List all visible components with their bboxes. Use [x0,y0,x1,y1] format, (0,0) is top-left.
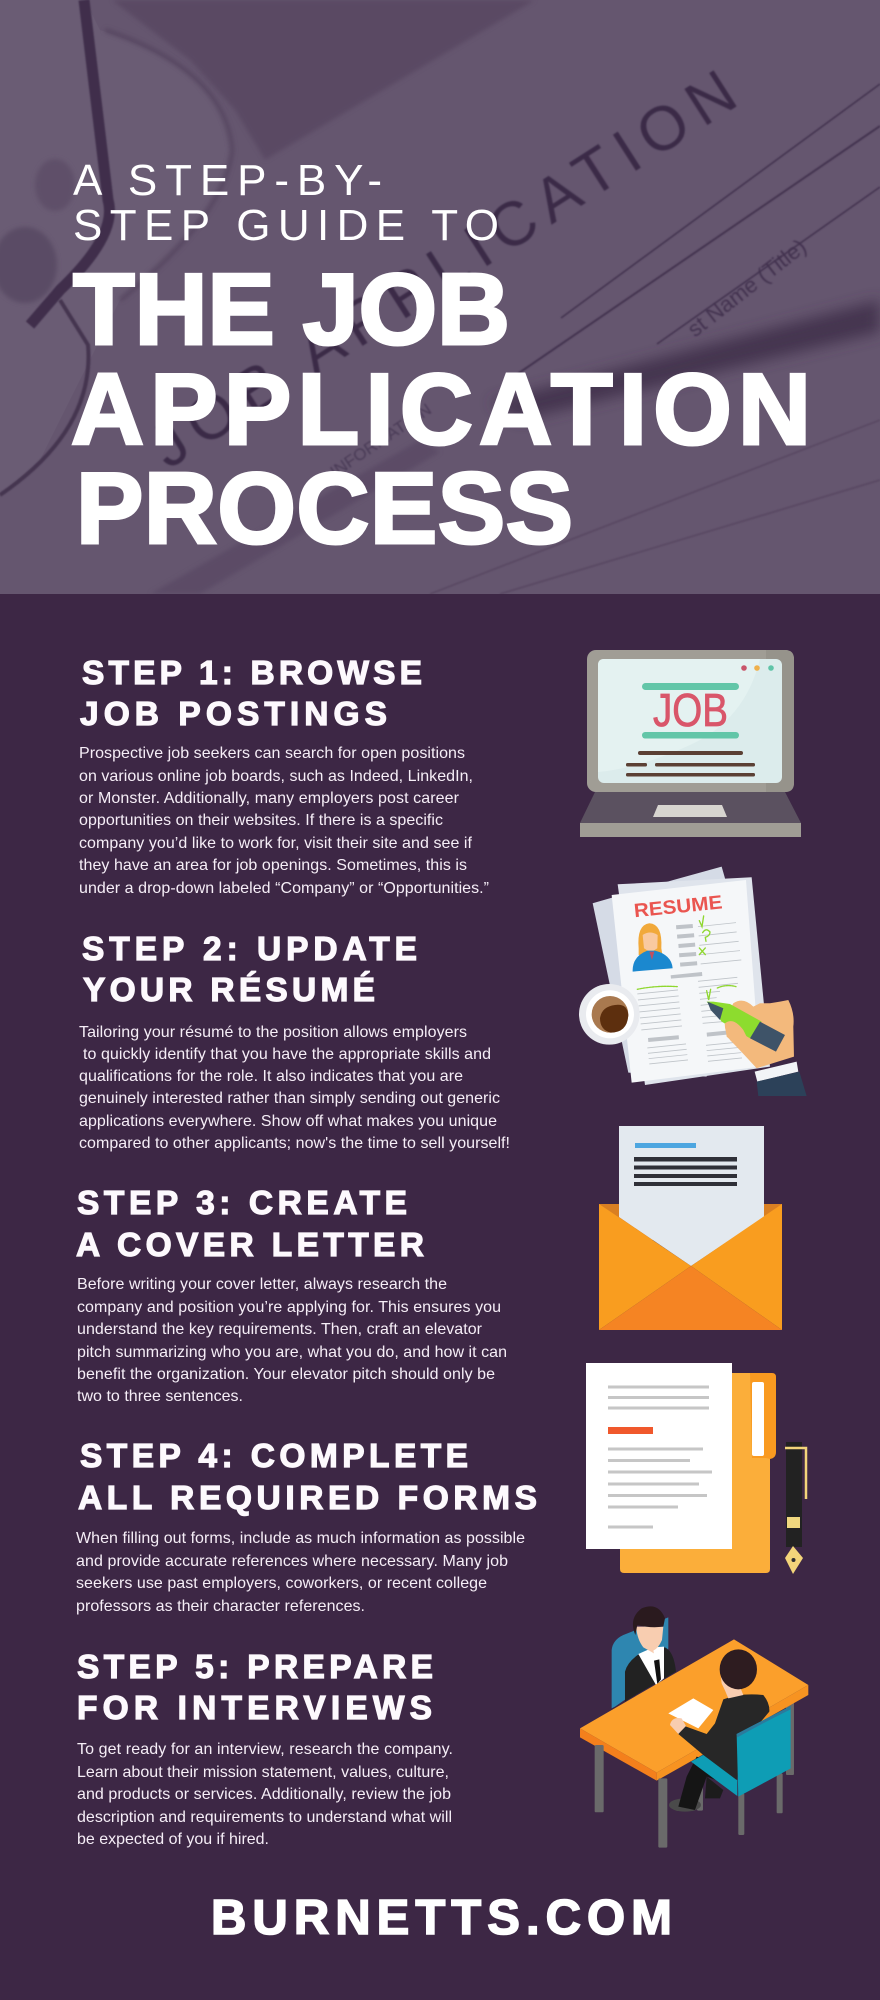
interviewer and chair [612,1606,676,1708]
hand with highlighter [707,1000,807,1096]
icon: envelope with letter [599,1126,782,1330]
step 1 body [79,745,489,897]
step 2 body: compared to other applicants; now's the time to sell yourself! [79,1135,510,1152]
step 2 heading: STEP 2: UPDATE [82,931,417,968]
step 5 body: and products or services. Additionally, review the job [77,1786,451,1803]
green review marks [637,916,736,1000]
step 4 body: When filling out forms, include as much information as possible [76,1530,525,1547]
step 2 heading: YOUR RÉSUMÉ [83,971,375,1009]
title: A STEP-BY- [73,156,382,205]
step 3 heading: STEP 3: CREATE [77,1185,407,1222]
step 2 body: genuinely interested rather than simply sending out generic [79,1090,500,1107]
step 1 body: or Monster. Additionally, many employers post career [79,790,460,807]
step 5 body: description and requirements to understand what will [77,1809,452,1826]
step 2 body: to quickly identify that you have the appropriate skills and [83,1046,491,1063]
step 5 heading [77,1649,433,1727]
header photo: job application form with glasses and pen: INFORMATION [327,400,435,481]
icon: resume with highlighter and coffee [579,867,807,1096]
title: PROCESS [76,453,573,565]
icon: laptop showing job listing: JOB [653,684,728,736]
fountain pen [785,1442,806,1574]
step 3 body: two to three sentences. [77,1388,243,1405]
header photo: job application form with glasses and pen: JOB APPLICATION [138,57,748,482]
step 2 body: Tailoring your résumé to the position allows employers [79,1024,467,1041]
step 4 body [76,1530,525,1615]
icon: folder with document and fountain pen [586,1363,806,1574]
step 5 heading: FOR INTERVIEWS [77,1690,432,1727]
title: APPLICATION [71,354,811,466]
step 4 heading [78,1438,537,1517]
step 2 text block [79,931,510,1152]
step 3 body: company and position you’re applying for. This ensures you [77,1299,501,1316]
step 3 text block [76,1185,507,1405]
step 3 body: benefit the organization. Your elevator pitch should only be [77,1366,495,1383]
icon: laptop showing job listing [580,650,801,837]
step 2 body: qualifications for the role. It also indicates that you are [79,1068,463,1085]
title [71,156,811,565]
step 1 heading: STEP 1: BROWSE [82,655,422,692]
step 3 heading: A COVER LETTER [76,1227,424,1264]
header photo: job application form with glasses and pen: st Name (Title) [683,234,811,342]
step 5 heading: STEP 5: PREPARE [77,1649,433,1686]
step 1 body: company you’d like to work for, visit their site and see if [79,835,473,852]
step 3 body: Before writing your cover letter, always research the [77,1276,447,1293]
step 2 heading [82,931,417,1009]
step 2 body: applications everywhere. Show off what makes you unique [79,1113,497,1130]
coffee cup [579,984,640,1045]
step 3 body: pitch summarizing who you are, what you do, and how it can [77,1344,507,1361]
step 4 body: seekers use past employers, coworkers, or recent college [76,1575,487,1592]
icon: job interview at a desk [580,1606,808,1848]
step 1 heading [80,655,422,733]
step 4 body: professors as their character references. [76,1598,365,1615]
title: THE JOB [73,254,510,366]
resume page [612,880,760,1083]
step 5 text block [77,1649,453,1848]
step 4 heading: ALL REQUIRED FORMS [78,1480,537,1517]
candidate and chair [669,1649,791,1835]
step 4 body: and provide accurate references where necessary. Many job [76,1553,508,1570]
step 1 body: on various online job boards, such as Indeed, LinkedIn, [79,768,473,785]
step 1 heading: JOB POSTINGS [80,696,387,733]
resume heading: RESUME [633,892,723,922]
step 1 body: Prospective job seekers can search for open positions [79,745,465,762]
title: STEP GUIDE TO [73,201,499,250]
step 4 text block [76,1438,537,1615]
website footer: BURNETTS.COM [211,1891,672,1945]
step 1 body: opportunities on their websites. If there is a specific [79,812,443,829]
step 1 body: they have an area for job openings. Sometimes, this is [79,857,467,874]
step 3 heading [76,1185,424,1264]
step 2 body [79,1024,510,1152]
header photo: job application form with glasses and pen [0,0,880,594]
step 5 body: Learn about their mission statement, values, culture, [77,1764,449,1781]
step 1 text block [79,655,489,897]
step 5 body: To get ready for an interview, research the company. [77,1741,453,1758]
back table legs [786,1702,794,1775]
step 1 body: under a drop-down labeled “Company” or “Opportunities.” [79,880,489,897]
step 3 body: understand the key requirements. Then, craft an elevator [77,1321,483,1338]
step 5 body: be expected of you if hired. [77,1831,269,1848]
step 3 body [77,1276,507,1405]
back sheets [593,867,770,1085]
form rows [648,924,727,1042]
step 4 heading: STEP 4: COMPLETE [80,1438,468,1475]
desk [580,1639,808,1848]
step 5 body [77,1741,453,1848]
portrait of woman [633,923,673,972]
